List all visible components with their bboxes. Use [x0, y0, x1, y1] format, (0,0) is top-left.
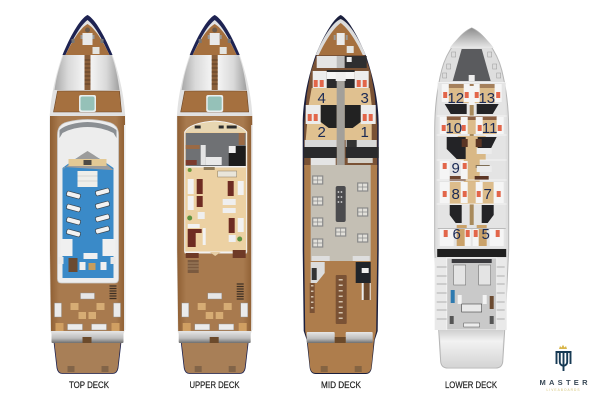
stern — [440, 330, 504, 367]
sun loungers — [66, 188, 110, 237]
wood side decks — [304, 165, 377, 373]
cabin numbers — [318, 90, 369, 141]
heading: deck names — [69, 380, 497, 390]
panel: upper deck — [177, 15, 253, 374]
salon interior — [185, 121, 247, 252]
lounge and dining area — [311, 165, 371, 261]
aft benches and stairs — [185, 250, 247, 273]
aft rooms and bars — [310, 262, 371, 324]
panel: top deck — [50, 15, 126, 374]
logo: Master Liveaboards: MASTER — [540, 378, 588, 387]
cabin bathrooms — [445, 104, 499, 223]
logo: Master Liveaboards: LIVEABOARDS — [546, 388, 580, 392]
heading: deck names: UPPER DECK — [190, 380, 240, 390]
cabin floors — [438, 83, 506, 248]
heading: deck names: LOWER DECK — [445, 380, 497, 390]
cabin numbers: 10 — [445, 120, 462, 137]
cabin bunks — [440, 84, 504, 246]
deck house with sun deck — [58, 120, 118, 283]
cabin beds — [308, 80, 373, 121]
cabin numbers: 4 — [318, 90, 326, 107]
cabin numbers: 5 — [482, 226, 490, 243]
cabin numbers: 7 — [484, 186, 492, 203]
cabin numbers: 13 — [478, 90, 495, 107]
cabin numbers: 12 — [447, 90, 464, 107]
cabin numbers: 3 — [361, 90, 369, 107]
heading: deck names: TOP DECK — [69, 380, 109, 390]
cabin numbers: 2 — [318, 124, 326, 141]
cabin numbers: 9 — [452, 160, 460, 177]
dark tank bar — [437, 249, 506, 257]
heading: deck names: MID DECK — [321, 380, 361, 390]
aft bench band — [307, 332, 373, 371]
aft stairs — [237, 284, 244, 299]
cabin dividers — [437, 82, 507, 204]
engine room — [435, 258, 507, 330]
cabin block — [304, 55, 379, 175]
cabin numbers: 11 — [482, 120, 497, 137]
panel: lower deck — [435, 28, 509, 368]
cabin numbers: 8 — [452, 186, 460, 203]
cabin numbers: 6 — [453, 226, 461, 243]
logo: Master Liveaboards — [540, 345, 588, 392]
cabin numbers: 1 — [361, 124, 369, 141]
aft stairs — [110, 286, 116, 298]
pool-side furniture — [58, 239, 116, 272]
panel: mid deck — [303, 15, 379, 374]
cabin numbers — [445, 90, 497, 243]
